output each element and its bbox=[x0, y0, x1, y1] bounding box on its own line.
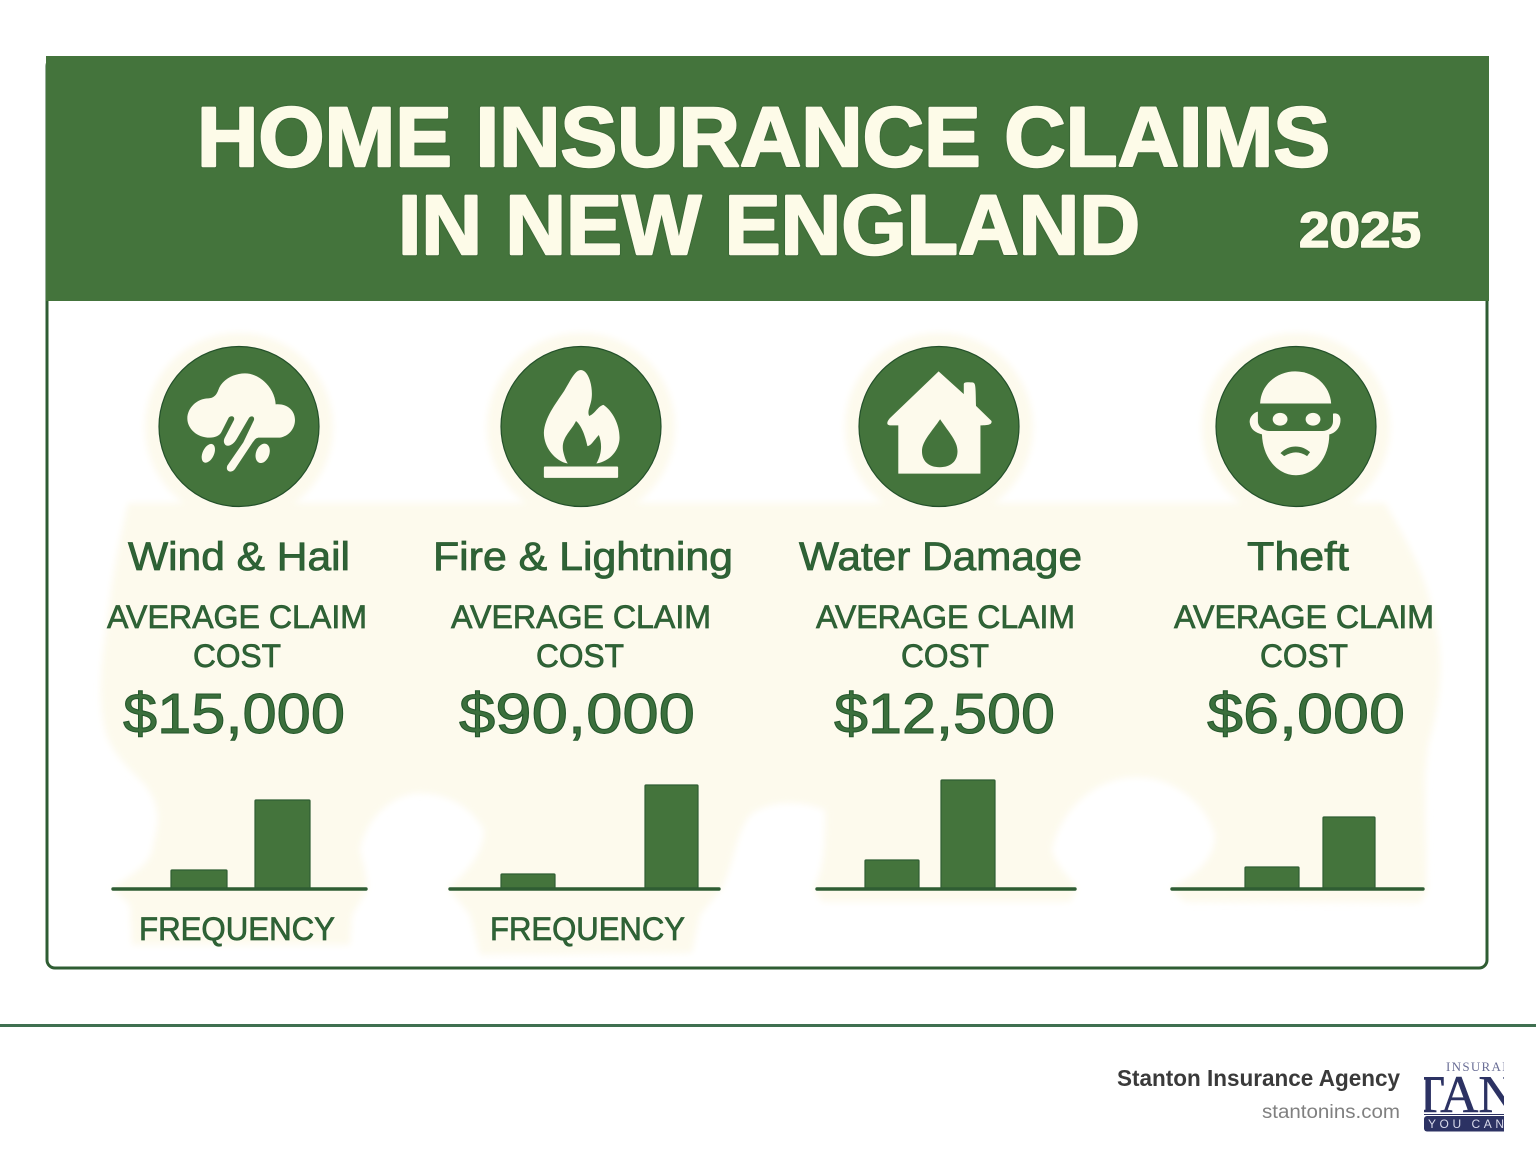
label: average claim cost: COST bbox=[901, 638, 989, 674]
panel: card outline bbox=[47, 58, 1487, 968]
footer: website: stantonins.com bbox=[1262, 1102, 1400, 1123]
title: HOME INSURANCE CLAIMS bbox=[197, 90, 1330, 184]
footer rule bbox=[0, 1024, 1536, 1027]
label: average claim cost bbox=[107, 599, 367, 674]
bar chart: theft frequency bbox=[1172, 817, 1423, 889]
label: frequency: FREQUENCY bbox=[490, 911, 685, 947]
value: 15000: $15,000 bbox=[123, 682, 345, 746]
footer: agency name: Stanton Insurance Agency bbox=[1117, 1065, 1400, 1091]
cream backdrop behind the claim columns bbox=[101, 333, 1440, 955]
bar chart: fire and lightning frequency bbox=[450, 785, 719, 889]
label: frequency: FREQUENCY bbox=[139, 911, 335, 947]
panel: wind and hail bbox=[107, 346, 367, 947]
label: average claim cost: AVERAGE CLAIM bbox=[1174, 599, 1434, 635]
value: 12500: $12,500 bbox=[834, 682, 1055, 746]
bar chart: wind and hail frequency bbox=[113, 800, 366, 889]
heading: theft: Theft bbox=[1247, 535, 1349, 579]
heading: water damage: Water Damage bbox=[799, 535, 1082, 579]
bar chart: water damage frequency bbox=[817, 780, 1075, 889]
label: average claim cost: COST bbox=[193, 638, 281, 674]
panel: fire and lightning bbox=[433, 346, 733, 947]
icon: masked burglar bbox=[1216, 346, 1376, 506]
icon: flame bbox=[501, 346, 661, 506]
title: IN NEW ENGLAND bbox=[398, 178, 1140, 272]
value: 6000: $6,000 bbox=[1207, 682, 1405, 746]
panel: theft bbox=[1172, 346, 1434, 889]
logo: cropped agency mark: YOU CAN bbox=[1428, 1117, 1504, 1131]
icon: house with water drop bbox=[859, 346, 1019, 506]
label: average claim cost: AVERAGE CLAIM bbox=[816, 599, 1075, 635]
value: 90000: $90,000 bbox=[459, 682, 695, 746]
logo: cropped agency mark: INSURANCE bbox=[1446, 1059, 1532, 1074]
label: average claim cost: COST bbox=[1260, 638, 1348, 674]
label: average claim cost: AVERAGE CLAIM bbox=[107, 599, 367, 635]
logo: cropped agency mark: TAN bbox=[1412, 1066, 1517, 1124]
label: average claim cost: AVERAGE CLAIM bbox=[451, 599, 711, 635]
label: average claim cost bbox=[1174, 599, 1434, 674]
heading: wind and hail: Wind & Hail bbox=[128, 535, 350, 579]
label: average claim cost bbox=[451, 599, 711, 674]
label: average claim cost bbox=[816, 599, 1075, 674]
year badge: 2025 bbox=[1299, 202, 1421, 258]
header banner bbox=[46, 56, 1489, 301]
label: average claim cost: COST bbox=[536, 638, 624, 674]
icon: storm cloud with hail bbox=[159, 346, 319, 506]
heading: fire and lightning: Fire & Lightning bbox=[433, 535, 733, 579]
panel: water damage bbox=[799, 346, 1082, 889]
logo: cropped agency mark bbox=[1424, 1062, 1504, 1132]
title bbox=[197, 90, 1330, 272]
